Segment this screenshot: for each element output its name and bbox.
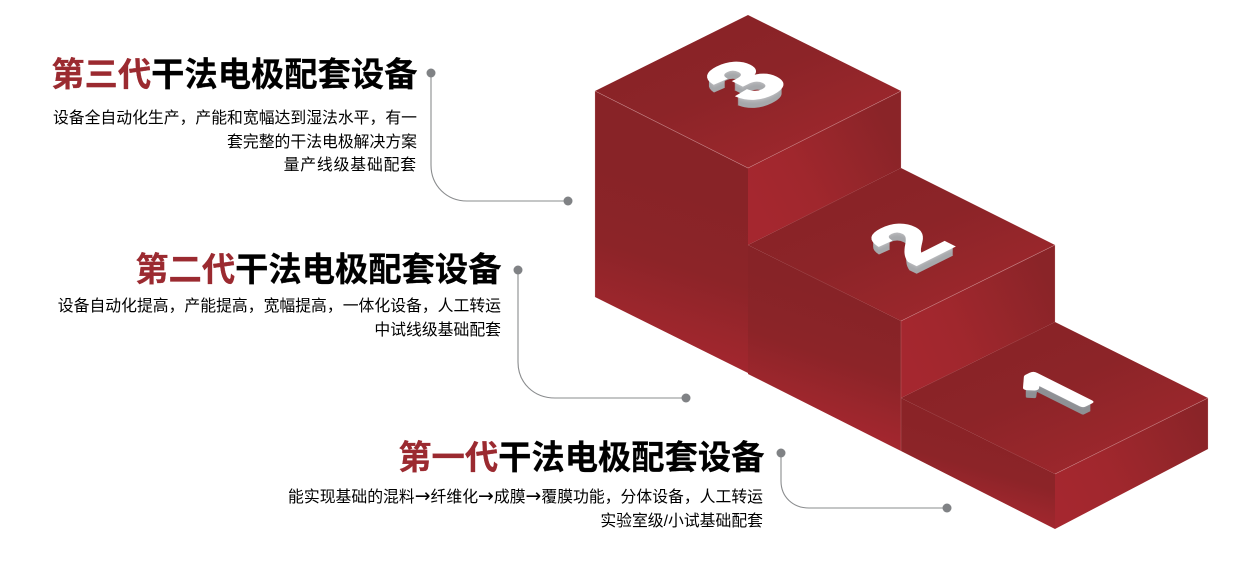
digit 1: 1: [999, 362, 1120, 422]
text: second generation description: 设备自动化提高，产能提高，宽幅提高，一体化设备，人工转运: [58, 298, 501, 315]
text: second generation description: 中试线级基础配套: [374, 322, 501, 338]
heading: third generation: 第三代干法电极配套设备: [51, 56, 418, 94]
text: third generation description: 设备全自动化生产，产能和宽幅达到湿法水平，有一: [53, 110, 417, 127]
text: first generation description: [288, 485, 763, 530]
heading: first generation: 第一代干法电极配套设备: [398, 440, 764, 476]
digit 2: 2: [846, 211, 973, 275]
digit 3: 3: [682, 49, 809, 113]
text: second generation description: [58, 297, 501, 338]
text: third generation description: [53, 109, 417, 174]
text: first generation description: 实验室级/小试基础配套: [600, 512, 763, 530]
text: third generation description: 套完整的干法电极解决方案: [227, 134, 417, 150]
text: third generation description: 量产线级基础配套: [284, 157, 417, 174]
heading: second generation: 第二代干法电极配套设备: [135, 252, 502, 288]
text: first generation description: 能实现基础的混料→纤维化→成膜→覆膜功能，分体设备，人工转运: [288, 485, 763, 507]
